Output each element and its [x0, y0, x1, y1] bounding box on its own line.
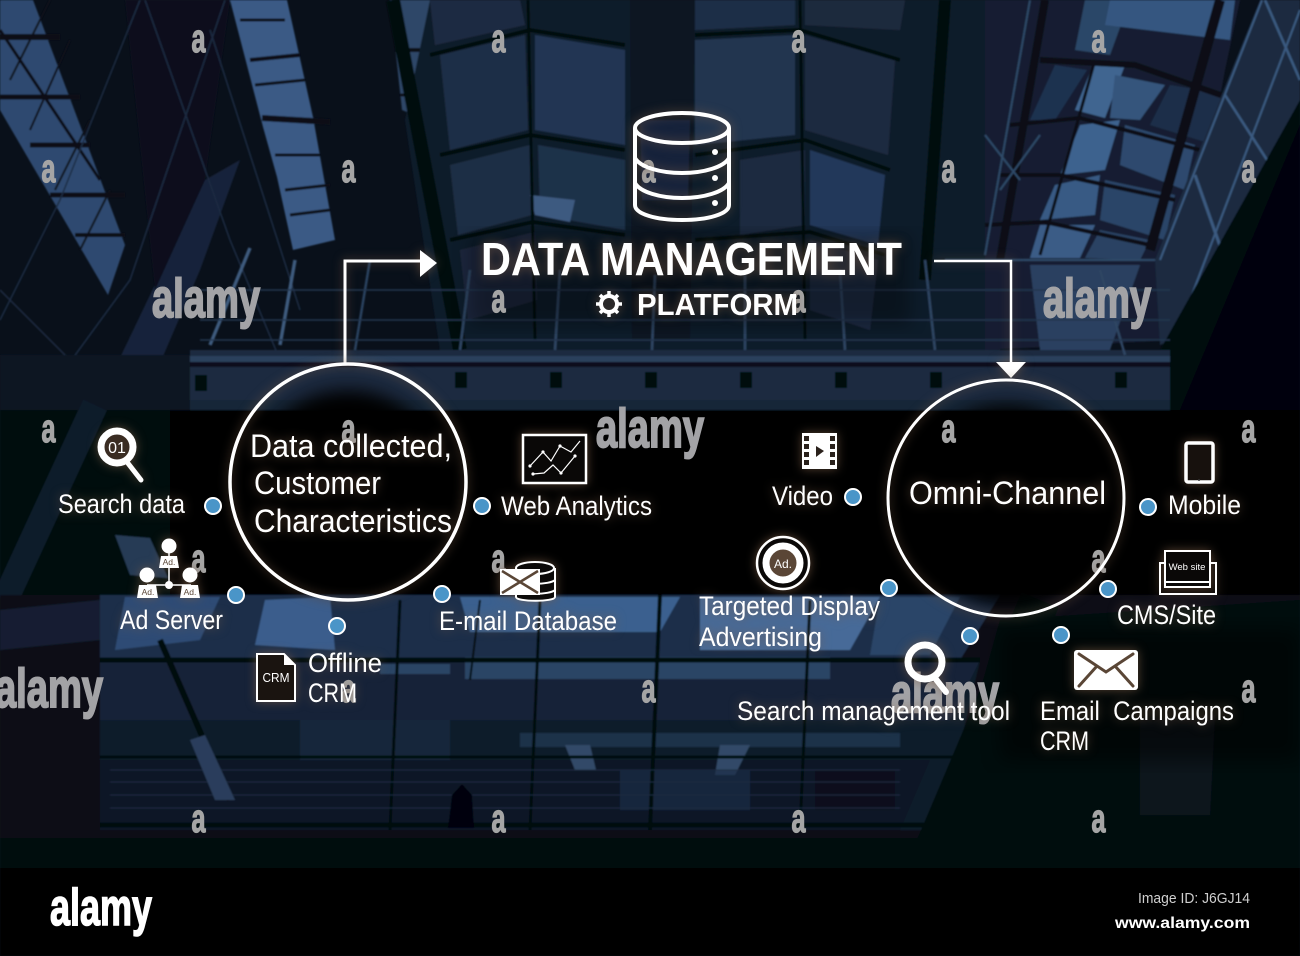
item: offline crm: CRM: [308, 678, 357, 708]
watermarks: a: [1092, 537, 1106, 581]
item: search management tool: Search management tool: [737, 696, 1010, 726]
watermarks: alamy: [596, 397, 704, 459]
footer: image id and url: Image ID: J6GJ14: [1138, 890, 1250, 907]
watermarks: a: [1092, 17, 1106, 61]
watermarks: alamy: [152, 267, 260, 329]
watermarks: a: [792, 797, 806, 841]
watermarks: a: [342, 407, 356, 451]
watermarks: a: [792, 17, 806, 61]
panel: omni-channel circle: Omni-Channel: [909, 475, 1106, 511]
watermarks: a: [492, 537, 506, 581]
right side roof panes: [985, 0, 1240, 350]
watermarks: alamy: [1043, 267, 1151, 329]
watermarks: a: [642, 667, 656, 711]
lower hall: [0, 595, 1300, 870]
subtitle with gear icon: PLATFORM: [637, 287, 798, 322]
panel: omni-channel circle: [888, 380, 1124, 616]
watermarks: a: [792, 277, 806, 321]
item: cms site: Web site: [1169, 562, 1205, 573]
item: e-mail database: E-mail Database: [439, 606, 617, 636]
watermarks: a: [342, 667, 356, 711]
item: targeted display advertising: Advertising: [699, 622, 822, 652]
item: video: Video: [772, 481, 833, 511]
item: offline crm: [257, 648, 382, 708]
item: ad server: Ad Server: [120, 605, 223, 635]
watermarks: a: [942, 407, 956, 451]
item: email campaigns crm: [1040, 650, 1234, 756]
watermarks: a: [492, 277, 506, 321]
left dark frame lattice: [0, 0, 450, 250]
item: mobile: [1168, 443, 1241, 520]
connector dots: [205, 489, 1156, 644]
item: ad server: Ad.: [142, 587, 154, 597]
item: targeted display advertising: Ad.: [774, 557, 792, 571]
footer: alamy logo: alamy: [50, 879, 152, 937]
watermarks: a: [342, 147, 356, 191]
watermarks: a: [192, 17, 206, 61]
item: cms site: CMS/Site: [1117, 600, 1216, 630]
item: web analytics: Web Analytics: [501, 491, 652, 521]
panel: data collected circle: Characteristics: [254, 503, 452, 539]
watermarks: a: [492, 797, 506, 841]
arrow: inputs to platform: [345, 250, 437, 363]
watermarks: alamy: [891, 662, 999, 724]
watermarks: a: [492, 17, 506, 61]
item: ad server: Ad.: [163, 557, 175, 567]
item: targeted display advertising: [699, 537, 881, 652]
panel: data collected circle: Data collected,: [250, 428, 452, 464]
watermarks: a: [192, 797, 206, 841]
right glass truss: [1155, 0, 1300, 345]
item: web analytics: [501, 435, 652, 521]
watermarks: a: [1242, 147, 1256, 191]
watermarks: a: [42, 407, 56, 451]
item: ad server: Ad.: [184, 587, 196, 597]
watermarks: a: [192, 537, 206, 581]
watermarks: a: [1242, 667, 1256, 711]
panel: data collected circle: Customer: [254, 465, 381, 501]
item: search data: [58, 431, 185, 519]
left sky panes: [0, 0, 125, 295]
watermarks: a: [42, 147, 56, 191]
upper centre glass roof: [405, 0, 1030, 350]
icon: database cylinder: [635, 113, 729, 220]
dark halos behind the circles: [248, 390, 448, 590]
item: search management tool: [737, 645, 1010, 726]
watermarks: a: [1092, 797, 1106, 841]
item: search data: Search data: [58, 489, 185, 519]
title: DATA MANAGEMENT: [481, 233, 902, 285]
item: offline crm: CRM: [262, 670, 290, 685]
item: search data: 01: [108, 440, 126, 457]
item: ad server: [120, 538, 223, 635]
arrow: platform to omni-channel: [934, 261, 1026, 378]
item: targeted display advertising: Targeted Display: [699, 591, 881, 621]
footer: image id and url: www.alamy.com: [1114, 915, 1250, 932]
item: email campaigns crm: Email Campaigns: [1040, 696, 1234, 726]
left pillar: [95, 160, 240, 410]
watermarks: a: [942, 147, 956, 191]
black middle band: [170, 410, 1300, 595]
footer: image id and url: [1114, 890, 1250, 932]
item: mobile: Mobile: [1168, 490, 1241, 520]
watermarks: a: [1242, 407, 1256, 451]
item: cms site: [1117, 551, 1216, 630]
panel: data collected circle: [230, 364, 466, 600]
item: offline crm: Offline: [308, 648, 382, 678]
item: e-mail database: [439, 562, 617, 636]
item: email campaigns crm: CRM: [1040, 726, 1089, 756]
item: video: [772, 433, 837, 511]
railing and beam: [190, 350, 1170, 410]
roof ribs: [393, 0, 945, 350]
watermarks: a: [642, 147, 656, 191]
